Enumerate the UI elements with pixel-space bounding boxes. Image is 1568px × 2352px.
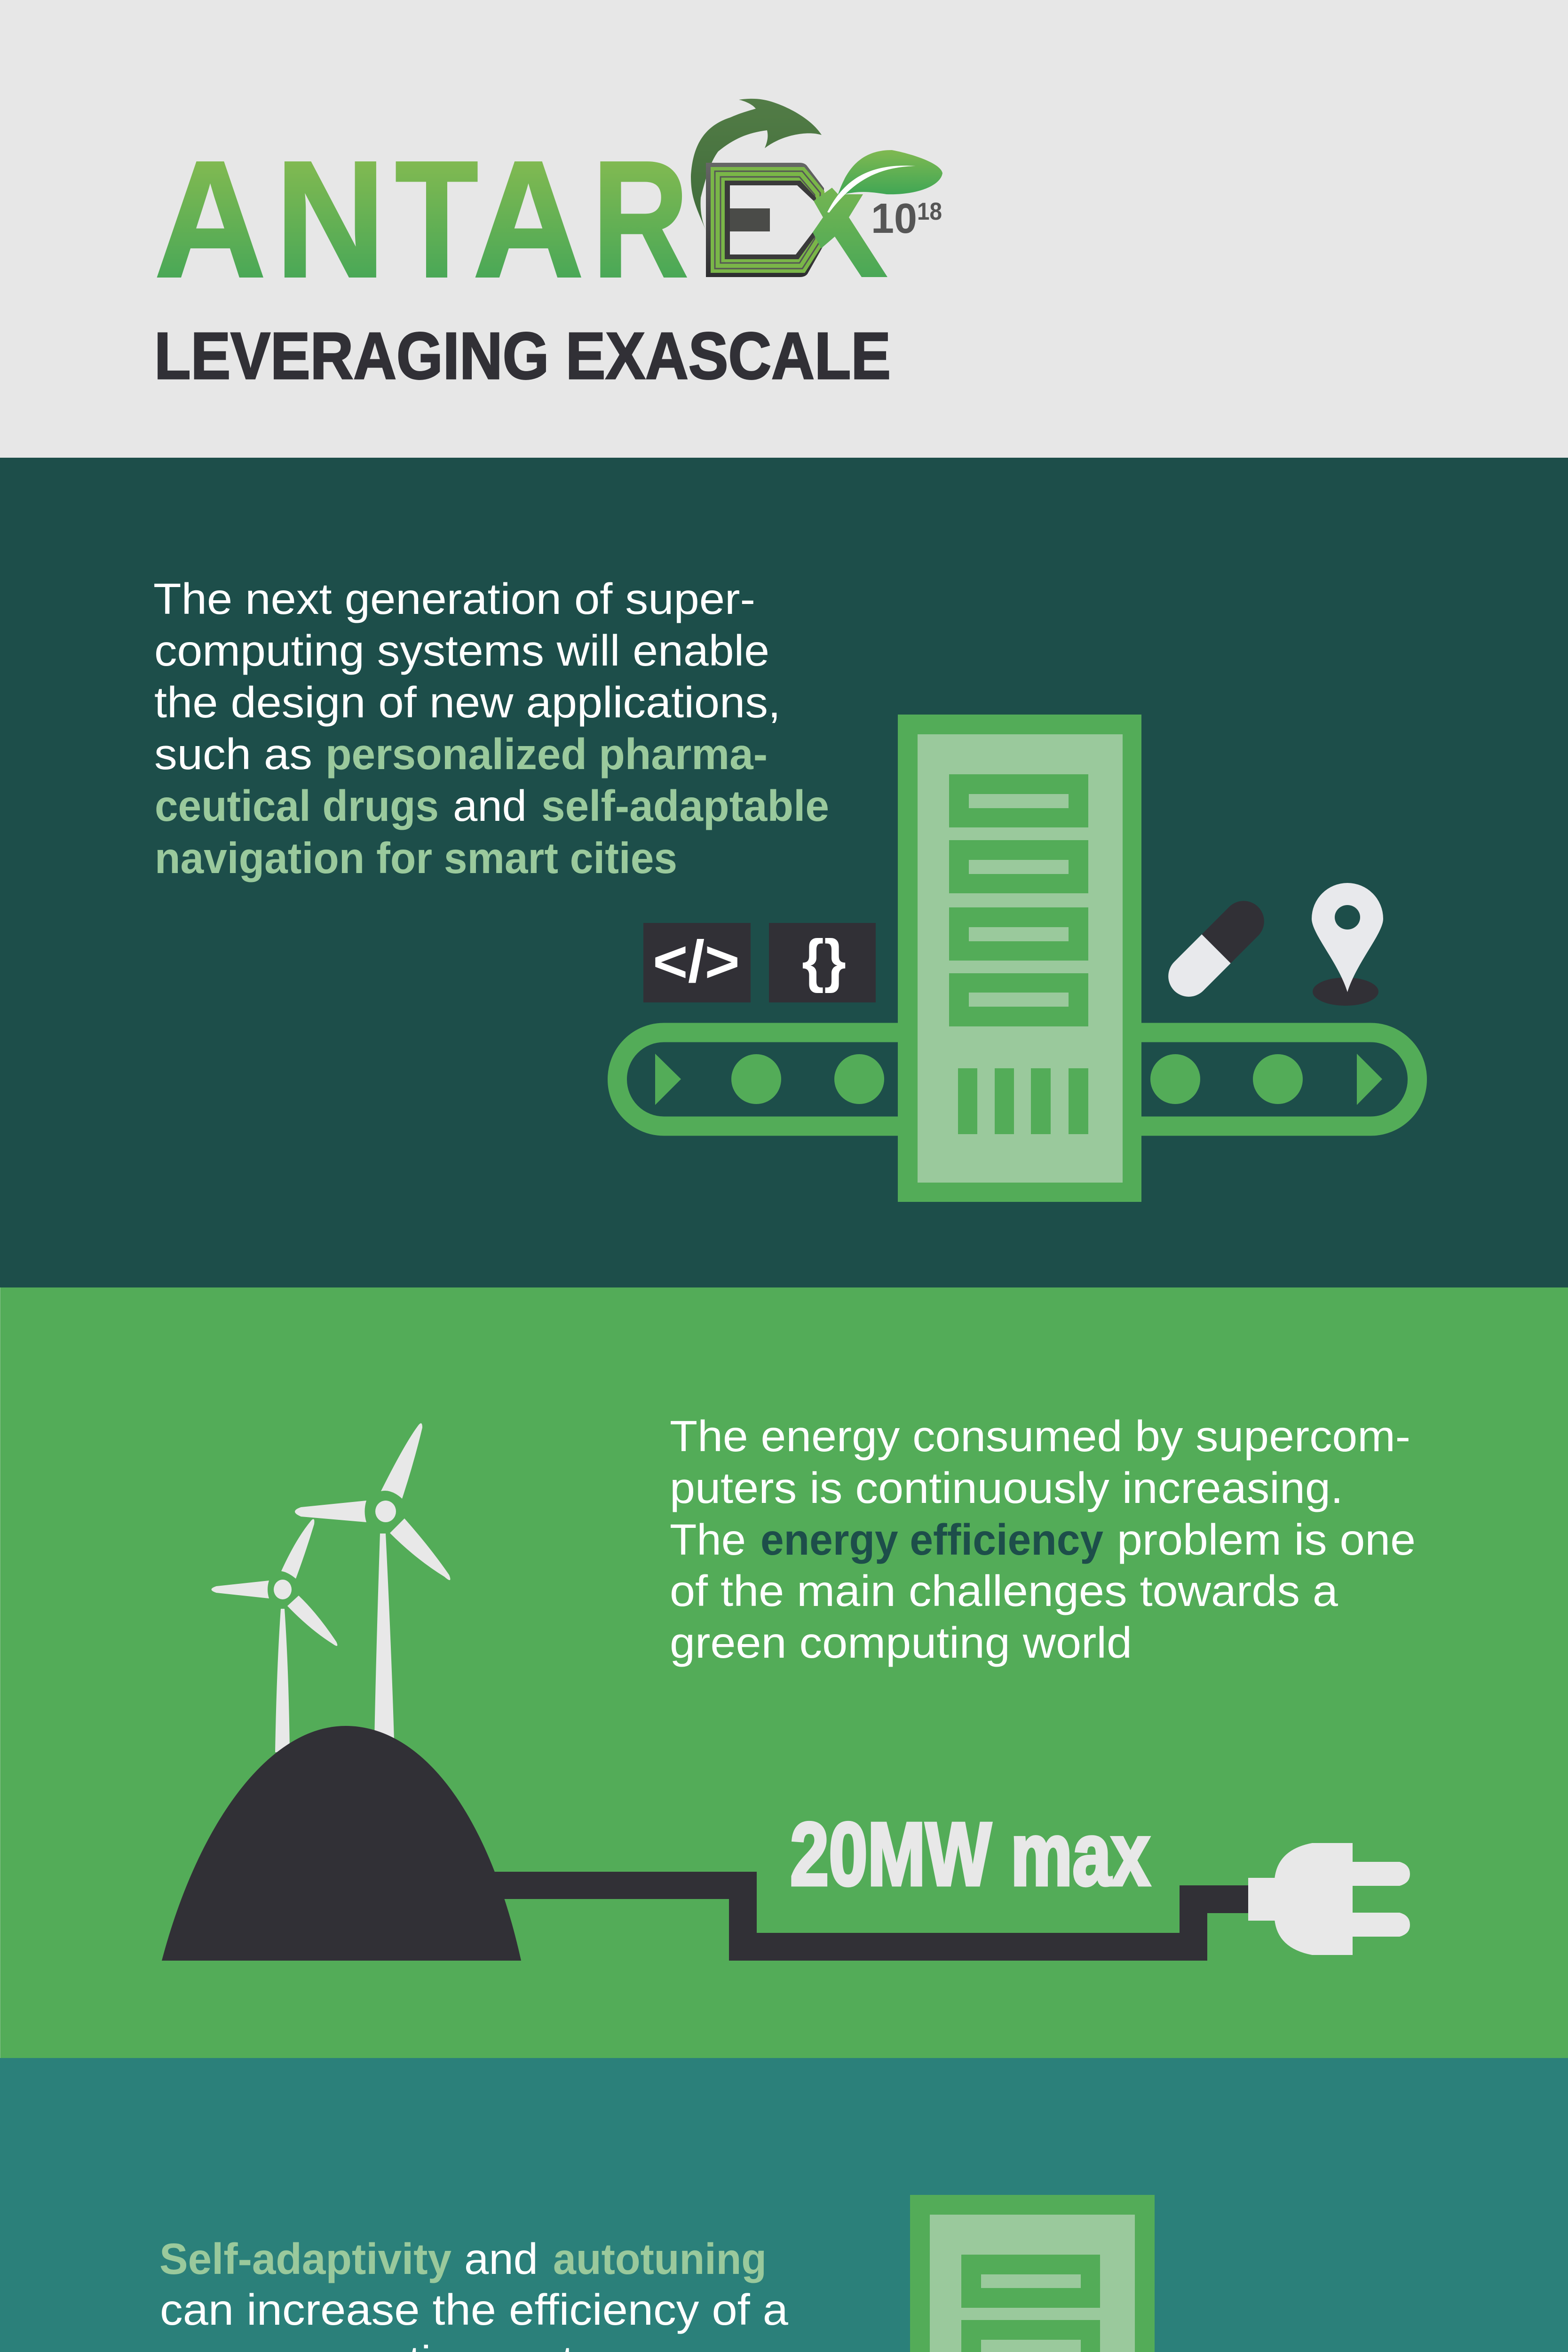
panel: self-adaptivity xyxy=(0,2058,1568,2352)
text: energy consumption: The xyxy=(670,1515,746,1564)
logo exponent: 18 xyxy=(917,198,942,225)
wind turbine large xyxy=(295,1423,450,1740)
plug xyxy=(1248,1843,1410,1955)
label: 20MW max: 20MW max xyxy=(790,1804,1150,1904)
text: energy consumption: energy efficiency xyxy=(760,1515,1103,1564)
text: self-adaptivity: and xyxy=(464,2234,538,2283)
text: next generation: navigation for smart cities xyxy=(155,834,677,882)
text: next generation: computing systems will enable xyxy=(154,626,769,675)
text: self-adaptivity: Self-adaptivity xyxy=(159,2234,451,2283)
text: energy consumption: green computing world xyxy=(670,1618,1132,1667)
logo letters ANTAR: N xyxy=(275,126,386,312)
text: energy consumption xyxy=(670,1412,1416,1667)
hill xyxy=(162,1726,521,1961)
server with dial xyxy=(910,2195,1155,2352)
icon: code tag: </> xyxy=(653,929,740,994)
text: next generation: ceutical drugs xyxy=(155,781,439,830)
panel: energy xyxy=(0,1287,1568,2058)
panel: header xyxy=(0,0,1568,458)
icon: braces xyxy=(769,923,876,1002)
text: self-adaptivity: autotuning xyxy=(553,2234,767,2283)
server xyxy=(898,715,1141,1202)
text: energy consumption: of the main challenges towards a xyxy=(670,1566,1338,1615)
conveyor belt xyxy=(617,1033,1418,1126)
power cable xyxy=(489,1872,1248,1961)
subtitle: LEVERAGING EXASCALE xyxy=(154,318,891,393)
text: self-adaptivity: can increase the efficiency of a xyxy=(160,2285,788,2334)
logo letters ANTAR xyxy=(154,126,689,312)
icon: braces: {} xyxy=(802,928,846,993)
text: next generation: self-adaptable xyxy=(541,781,829,830)
logo E block xyxy=(706,163,824,277)
logo letters ANTAR: R xyxy=(592,126,689,312)
panel: next generation applications xyxy=(0,458,1568,1287)
text: energy consumption: problem is one xyxy=(1117,1515,1416,1564)
text: energy consumption: The energy consumed by supercom- xyxy=(670,1412,1410,1461)
text: next generation xyxy=(153,574,829,882)
logo letters ANTAR: T xyxy=(395,126,478,312)
wind turbine small xyxy=(212,1519,337,1752)
logo: ANTAREX 10^18 xyxy=(154,99,942,312)
icon: code tag xyxy=(643,923,751,1002)
icon: map pin xyxy=(1312,883,1383,1006)
logo arrow xyxy=(691,99,822,230)
logo X xyxy=(813,188,887,277)
text: energy consumption: puters is continuously increasing. xyxy=(670,1463,1343,1512)
logo letters ANTAR: A xyxy=(154,126,266,312)
logo exponent: 10 xyxy=(871,195,917,242)
icon: pill xyxy=(1160,892,1273,1005)
text: next generation: The next generation of super- xyxy=(153,574,755,623)
logo exponent xyxy=(871,195,942,242)
text: next generation: and xyxy=(453,781,527,830)
conveyor left triangle xyxy=(655,1054,681,1105)
text: self-adaptivity xyxy=(159,2234,788,2352)
text: next generation: such as xyxy=(154,730,312,779)
logo letters ANTAR: A xyxy=(473,126,584,312)
text: next generation: personalized pharma- xyxy=(325,730,768,779)
text: next generation: the design of new applications, xyxy=(154,678,781,727)
conveyor right triangle xyxy=(1357,1054,1382,1105)
logo leaf xyxy=(838,150,942,194)
